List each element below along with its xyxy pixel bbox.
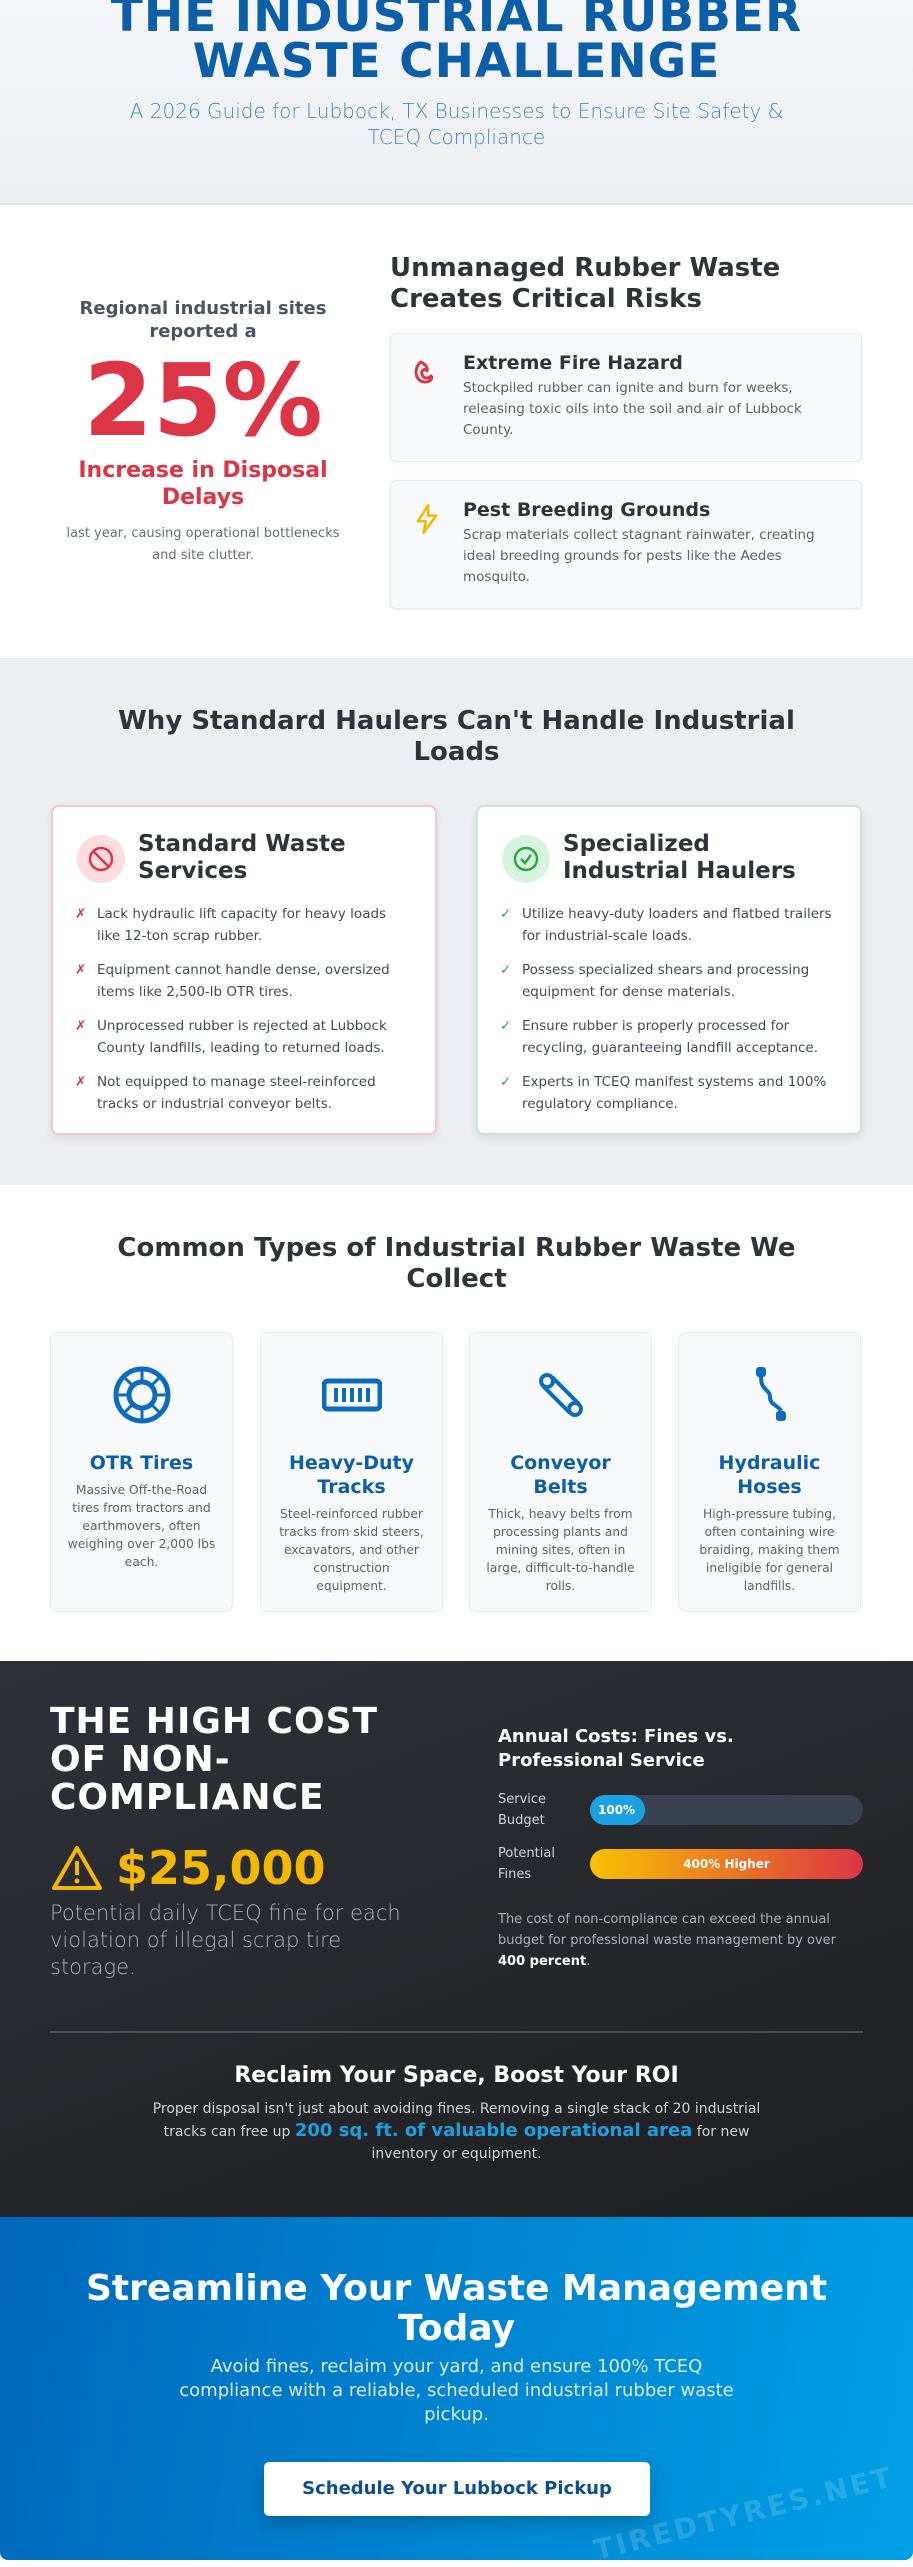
bar chart: Budget <box>498 1813 545 1828</box>
card: conveyor <box>469 1332 652 1612</box>
card: specialized: Utilize heavy-duty loaders and flatbed trailers for industrial-scale loads. <box>522 906 832 944</box>
card: OTR tires: Massive Off-the-Road tires from tractors and earthmovers, often weighing over 2,000 lbs each. <box>68 1483 215 1569</box>
card: specialized: ✓ <box>500 1018 511 1034</box>
card: pests: Pest Breeding Grounds <box>463 499 710 521</box>
card: conveyor: Belts <box>533 1476 588 1498</box>
title <box>110 0 802 89</box>
card: specialized: ✓ <box>500 962 511 978</box>
card: fire hazard <box>390 333 862 462</box>
icon: track <box>322 1378 382 1412</box>
stat block: 25% <box>83 342 323 459</box>
card: tracks: equipment. <box>316 1579 387 1593</box>
bar chart: 100% <box>598 1803 635 1817</box>
card: hoses: Hoses <box>737 1476 802 1498</box>
stat block: Regional industrial sites <box>80 298 326 319</box>
heading <box>50 1701 378 1818</box>
panel: stat and risks <box>0 205 913 658</box>
card: specialized: Ensure rubber is properly processed for recycling, guaranteeing landfill acceptance. <box>522 1018 818 1056</box>
card: conveyor: Conveyor <box>510 1452 611 1474</box>
header <box>0 0 913 205</box>
ROI block: Proper disposal isn't just about avoiding fines. Removing a single stack of 20 industrial tracks can free up 200 sq. ft. of valuable operational area for new inventory or equipment. <box>153 2101 760 2162</box>
card: tracks <box>260 1332 443 1612</box>
card: tracks: Tracks <box>317 1476 386 1498</box>
icon: warning <box>52 1846 102 1890</box>
card: fire hazard: Stockpiled rubber can ignite and burn for weeks, releasing toxic oils into the soil and air of Lubbock County. <box>463 380 802 438</box>
icon: hose <box>756 1367 786 1421</box>
CTA heading: Streamline Your Waste Management Today <box>86 2268 827 2349</box>
bar chart: 400% Higher <box>683 1857 770 1871</box>
card: standard: ✗ <box>75 962 86 978</box>
icon: check <box>502 835 550 883</box>
bar chart: Service <box>498 1792 546 1807</box>
fine figure: $25,000 <box>116 1841 326 1895</box>
subtitle: TCEQ Compliance <box>368 125 545 149</box>
bar chart: Annual Costs: Fines vs. <box>498 1726 734 1747</box>
stat block: Increase in Disposal <box>78 458 328 483</box>
card: standard: Unprocessed rubber is rejected at Lubbock County landfills, leading to returned loads. <box>97 1018 387 1056</box>
heading: THE HIGH COST <box>50 1701 378 1742</box>
card: standard: Standard Waste <box>138 831 346 857</box>
heading: Common Types of Industrial Rubber Waste We Collect <box>117 1233 796 1294</box>
card: standard: Not equipped to manage steel-reinforced tracks or industrial conveyor belts. <box>97 1074 376 1112</box>
card: standard: ✗ <box>75 906 86 922</box>
card: specialized: ✓ <box>500 906 511 922</box>
card: fire hazard: Extreme Fire Hazard <box>463 352 683 374</box>
title: WASTE CHALLENGE <box>193 34 720 89</box>
card: hoses: Hydraulic <box>719 1452 820 1474</box>
heading: Why Standard Haulers Can't Handle Industrial Loads <box>118 706 795 767</box>
card: pests: Scrap materials collect stagnant rainwater, creating ideal breeding grounds for pests like the Aedes mosquito. <box>463 527 815 585</box>
card: tracks: Heavy-Duty <box>289 1452 414 1474</box>
card: OTR tires: OTR Tires <box>90 1452 193 1474</box>
icon: ban <box>77 835 125 883</box>
risks heading: Creates Critical Risks <box>390 284 702 314</box>
card: hoses <box>678 1332 861 1612</box>
watermark: TIREDTYRES.NET <box>591 2460 897 2567</box>
card: standard: ✗ <box>75 1074 86 1090</box>
stat block: reported a <box>149 321 257 342</box>
panel: cost of non-compliance <box>0 1661 913 2218</box>
card: standard: ✗ <box>75 1018 86 1034</box>
stat block: Delays <box>162 485 244 510</box>
card: specialized: Specialized <box>563 831 710 857</box>
card: tracks: Steel-reinforced rubber tracks from skid steers, excavators, and other construction <box>279 1507 424 1575</box>
panel: waste types <box>0 1185 913 1660</box>
fine description: Potential daily TCEQ fine for each violation of illegal scrap tire storage. <box>50 1901 401 1979</box>
icon: tire <box>114 1366 170 1424</box>
card: standard: Lack hydraulic lift capacity for heavy loads like 12-ton scrap rubber. <box>97 906 386 944</box>
stat block <box>66 298 340 563</box>
card: standard: Equipment cannot handle dense, oversized items like 2,500-lb OTR tires. <box>97 962 390 1000</box>
bar chart: Professional Service <box>498 1750 705 1771</box>
bar chart: Fines <box>498 1867 531 1882</box>
subtitle: A 2026 Guide for Lubbock, TX Businesses to Ensure Site Safety & <box>130 99 783 123</box>
card: pests <box>390 480 862 609</box>
panel: call to action <box>0 2217 913 2560</box>
bar chart: The cost of non-compliance can exceed the annual budget for professional waste management by over 400 percent. <box>498 1912 836 1969</box>
risks heading <box>390 253 780 314</box>
stat block: last year, causing operational bottlenecks <box>66 526 340 541</box>
icon: belt <box>539 1373 583 1417</box>
bar chart: Potential <box>498 1846 555 1861</box>
button <box>264 2462 650 2516</box>
card: specialized: Experts in TCEQ manifest systems and 100% regulatory compliance. <box>522 1074 826 1112</box>
stat block: and site clutter. <box>152 548 254 563</box>
risks heading: Unmanaged Rubber Waste <box>390 253 780 283</box>
ROI block <box>153 2063 760 2162</box>
card: specialized: ✓ <box>500 1074 511 1090</box>
icon: fire <box>414 360 434 384</box>
ROI block: Reclaim Your Space, Boost Your ROI <box>234 2063 679 2088</box>
card: conveyor: Thick, heavy belts from processing plants and mining sites, often in large, difficult-to-handle rolls. <box>486 1507 635 1593</box>
card: standard: Services <box>138 858 247 884</box>
bar chart <box>498 1726 863 1969</box>
subtitle <box>130 99 783 149</box>
card: specialized: Possess specialized shears and processing equipment for dense materials. <box>522 962 809 1000</box>
panel: haulers comparison <box>0 658 913 1185</box>
card: standard <box>51 805 437 1135</box>
heading: COMPLIANCE <box>50 1777 325 1818</box>
card: specialized: Industrial Haulers <box>563 858 796 884</box>
card: hoses: High-pressure tubing, often containing wire braiding, making them ineligible for general landfills. <box>699 1507 840 1593</box>
CTA text: Avoid fines, reclaim your yard, and ensure 100% TCEQ compliance with a reliable, scheduled industrial rubber waste pickup. <box>179 2356 734 2425</box>
card: specialized <box>476 805 862 1135</box>
heading: OF NON- <box>50 1739 231 1780</box>
card: OTR tires <box>50 1332 233 1612</box>
button: Schedule Your Lubbock Pickup <box>302 2478 612 2499</box>
icon: lightning <box>416 504 438 534</box>
